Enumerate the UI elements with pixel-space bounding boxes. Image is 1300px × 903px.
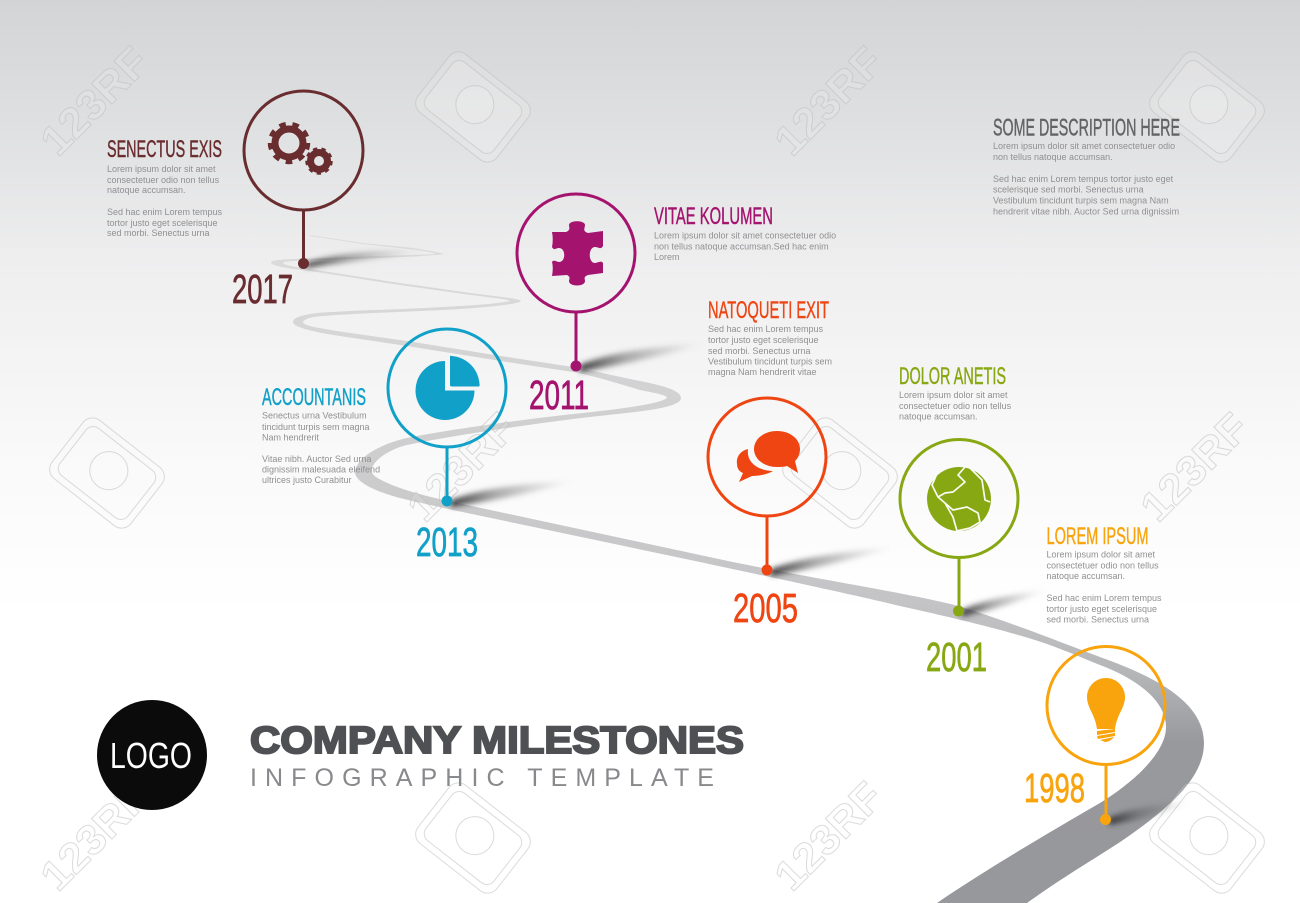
text block: Some Description Here: Lorem ipsum dolor sit amet consectetuer odio xyxy=(993,141,1175,151)
year 2001: 2001 xyxy=(926,634,987,680)
text block: Accountanis: dignissim malesuada eleifend xyxy=(262,464,380,474)
text block: Lorem Ipsum: natoque accumsan. xyxy=(1046,571,1125,581)
text block: Vitae Kolumen: Lorem ipsum dolor sit amet consectetuer odio xyxy=(654,230,836,240)
pin 2017 xyxy=(244,91,363,269)
logo xyxy=(97,700,207,810)
year 2017: 2017 xyxy=(232,266,293,312)
text block: Senectus Exis: tortor justo eget scelerisque xyxy=(107,218,218,228)
pin 2001 xyxy=(900,440,1018,616)
text block: Some Description Here: scelerisque sed morbi. Senectus urna xyxy=(993,184,1144,194)
text block: Dolor Anetis: Lorem ipsum dolor sit amet xyxy=(899,390,1008,400)
text block: Lorem Ipsum: sed morbi. Senectus urna xyxy=(1046,614,1149,624)
pin 2011 xyxy=(517,194,635,372)
text block: Senectus Exis: Lorem ipsum dolor sit amet xyxy=(107,164,216,174)
icon: pie chart xyxy=(416,356,480,420)
decorative watermark stamps: 123RF xyxy=(1131,404,1258,530)
text block: Senectus Exis: Sed hac enim Lorem tempus xyxy=(107,207,223,217)
text block: Accountanis: tincidunt turpis sem magna xyxy=(262,422,370,432)
text block: Lorem Ipsum: LOREM IPSUM xyxy=(1046,523,1148,550)
decorative watermark stamps: 123RF xyxy=(765,38,892,164)
text block: Some Description Here: non tellus natoque accumsan. xyxy=(993,152,1113,162)
text block: Some Description Here: Sed hac enim Lorem tempus tortor justo eget xyxy=(993,174,1174,184)
year 1998: 1998 xyxy=(1024,765,1085,811)
text block: Natoqueti Exit: Sed hac enim Lorem tempus xyxy=(708,324,824,334)
text block: Accountanis xyxy=(262,384,380,485)
text block: Natoqueti Exit: Vestibulum tincidunt turpis sem xyxy=(708,356,832,366)
text block: Dolor Anetis: consectetuer odio non tellus xyxy=(899,401,1012,411)
text block: Vitae Kolumen: non tellus natoque accumsan.Sed hac enim xyxy=(654,242,829,252)
text block: Dolor Anetis: natoque accumsan. xyxy=(899,412,978,422)
text block: Some Description Here xyxy=(993,114,1180,216)
text block: Natoqueti Exit: magna Nam hendrerit vitae xyxy=(708,367,817,377)
text block: Lorem Ipsum: tortor justo eget scelerisque xyxy=(1046,604,1157,614)
text block: Natoqueti Exit: tortor justo eget scelerisque xyxy=(708,335,819,345)
text block: Senectus Exis: SENECTUS EXIS xyxy=(107,136,222,163)
icon: light bulb xyxy=(1087,678,1125,742)
text block: Accountanis: ultrices justo Curabitur xyxy=(262,475,352,485)
subtitle: INFOGRAPHIC TEMPLATE xyxy=(250,764,714,792)
icon: puzzle piece xyxy=(552,221,603,286)
pin 2013 xyxy=(388,329,506,506)
text block: Accountanis: Vitae nibh. Auctor Sed urna xyxy=(262,454,371,464)
decorative watermark stamps: 123RF xyxy=(398,404,525,530)
text block: Vitae Kolumen xyxy=(654,203,836,262)
logo: LOGO xyxy=(110,735,192,776)
text block: Senectus Exis xyxy=(107,136,223,238)
text block: Senectus Exis: sed morbi. Senectus urna xyxy=(107,228,210,238)
text block: Some Description Here: SOME DESCRIPTION HERE xyxy=(993,114,1180,142)
winding road xyxy=(271,235,1204,903)
decorative watermark stamps: 123RF xyxy=(31,38,158,164)
text block: Dolor Anetis xyxy=(899,363,1012,422)
text block: Lorem Ipsum: Lorem ipsum dolor sit amet xyxy=(1046,550,1156,560)
title: COMPANY MILESTONES xyxy=(250,720,744,762)
decorative watermark stamps: 123RF xyxy=(765,773,892,899)
icon: globe xyxy=(927,467,991,531)
icon: gears xyxy=(270,124,331,173)
text block: Lorem Ipsum xyxy=(1046,523,1162,624)
text block: Accountanis: ACCOUNTANIS xyxy=(262,384,366,411)
text block: Vitae Kolumen: VITAE KOLUMEN xyxy=(654,203,773,230)
text block: Some Description Here: Vestibulum tincidunt turpis sem magna Nam xyxy=(993,196,1169,206)
pin 2005 xyxy=(708,398,826,576)
year 2011: 2011 xyxy=(529,372,589,418)
text block: Lorem Ipsum: Sed hac enim Lorem tempus xyxy=(1046,593,1162,603)
text block: Senectus Exis: consectetuer odio non tellus xyxy=(107,175,220,185)
text block: Senectus Exis: natoque accumsan. xyxy=(107,185,186,195)
text block: Dolor Anetis: DOLOR ANETIS xyxy=(899,363,1006,390)
decorative watermark stamps: 123RF xyxy=(31,773,158,899)
text block: Natoqueti Exit: sed morbi. Senectus urna xyxy=(708,346,811,356)
text block: Some Description Here: hendrerit vitae nibh. Auctor Sed urna dignissim xyxy=(993,206,1179,216)
text block: Accountanis: Senectus urna Vestibulum xyxy=(262,410,367,420)
icon: speech bubbles xyxy=(737,431,800,482)
text block: Natoqueti Exit: NATOQUETI EXIT xyxy=(708,297,829,324)
text block: Natoqueti Exit xyxy=(708,297,832,377)
text block: Lorem Ipsum: consectetuer odio non tellus xyxy=(1046,560,1159,570)
pin shadows xyxy=(306,251,1190,825)
text block: Accountanis: Nam hendrerit xyxy=(262,432,320,442)
pin 1998 xyxy=(1047,646,1165,825)
year 2013: 2013 xyxy=(416,519,478,565)
year 2005: 2005 xyxy=(733,585,798,631)
text block: Vitae Kolumen: Lorem xyxy=(654,252,680,262)
